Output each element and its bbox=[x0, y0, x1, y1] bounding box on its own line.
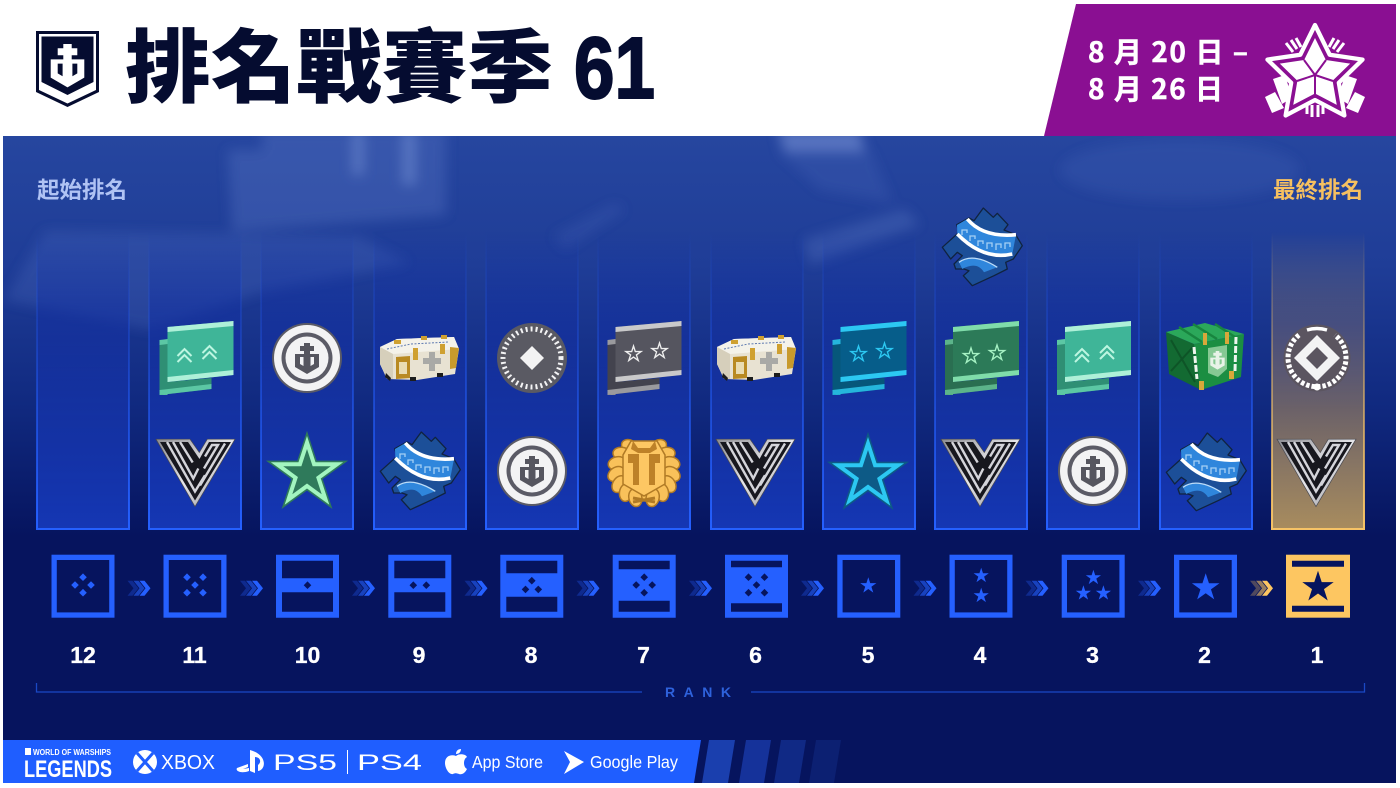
rank 12 icon bbox=[54, 557, 112, 615]
rank numbers: 2 bbox=[1198, 642, 1211, 668]
panel: rank 11 column bbox=[149, 232, 241, 529]
reward: silver V badge bbox=[1277, 439, 1356, 506]
gold arrow bbox=[1250, 581, 1273, 596]
rank 4 icon bbox=[952, 557, 1010, 615]
reward: blue patch bbox=[1166, 433, 1246, 511]
reward: grey star flag bbox=[608, 321, 682, 395]
title: 排名戰賽季 bbox=[125, 4, 553, 120]
logo: PS5 and PS4: PS5 bbox=[273, 750, 337, 775]
panel: rank 6 column bbox=[711, 232, 803, 529]
rank 7 icon bbox=[613, 555, 676, 618]
reward: white chest bbox=[380, 335, 459, 381]
reward: laurel diamond emblem bbox=[1284, 324, 1350, 392]
logo: World of Warships Legends: WORLD OF WARSHIPS bbox=[33, 748, 112, 757]
reward: anchor coin bbox=[272, 323, 342, 393]
rank numbers: 12 bbox=[70, 642, 96, 668]
rank numbers: 4 bbox=[974, 642, 987, 668]
reward: anchor coin bbox=[497, 436, 567, 506]
footer bar bbox=[3, 740, 841, 783]
rank 6 icon bbox=[725, 555, 788, 618]
logo: PS5 and PS4: PS4 bbox=[357, 750, 422, 775]
date text: 8 月 26 日 bbox=[1088, 68, 1223, 108]
logo: Google Play bbox=[564, 751, 678, 774]
rank 5 icon bbox=[840, 557, 898, 615]
panel: rank 9 column bbox=[374, 232, 466, 529]
icon: ranked star emblem bbox=[1265, 25, 1365, 117]
rank numbers: 7 bbox=[637, 642, 650, 668]
logo: World of Warships Legends: LEGENDS bbox=[24, 756, 112, 783]
logo: Xbox bbox=[133, 750, 215, 774]
rank 10 icon bbox=[276, 555, 339, 618]
rank 3 icon bbox=[1064, 557, 1122, 615]
reward: silver V badge bbox=[716, 439, 795, 506]
rank 2 icon bbox=[1177, 557, 1234, 615]
reward: diamond coin bbox=[497, 323, 567, 393]
label: final rank: 最終排名 bbox=[1273, 173, 1363, 205]
rank numbers: 6 bbox=[749, 642, 762, 668]
logo: App Store: App Store bbox=[472, 752, 543, 772]
reward: green star bbox=[269, 434, 345, 506]
reward: blue patch bbox=[380, 432, 460, 510]
reward: green chevron flag bbox=[1057, 321, 1131, 395]
rank numbers bbox=[70, 642, 1324, 668]
logo: Google Play: Google Play bbox=[590, 752, 678, 772]
panel: rank 4 column bbox=[935, 208, 1027, 529]
rank numbers: 9 bbox=[413, 642, 425, 668]
reward: cyan star bbox=[830, 435, 906, 507]
logo: World of Warships Legends bbox=[24, 748, 112, 783]
reward: green chevron flag bbox=[160, 321, 234, 395]
reward: silver V badge bbox=[941, 439, 1020, 506]
panel: rank 5 column bbox=[823, 232, 915, 529]
rank label: RANK bbox=[665, 684, 731, 700]
reward: white chest bbox=[717, 335, 796, 381]
progress arrows bbox=[128, 581, 1273, 596]
reward: blue patch bbox=[942, 208, 1022, 286]
panel: rank 3 column bbox=[1047, 232, 1139, 529]
panel: rank 7 column bbox=[598, 232, 690, 529]
icon: game shield logo bbox=[36, 31, 99, 107]
rank numbers: 3 bbox=[1086, 642, 1099, 668]
panel: rank 10 column bbox=[261, 232, 353, 529]
date text: 8 月 20 日 – bbox=[1088, 31, 1248, 71]
rank 1 icon bbox=[1286, 555, 1350, 618]
rank numbers: 11 bbox=[182, 642, 207, 668]
rank numbers: 1 bbox=[1311, 642, 1324, 668]
title: 61 bbox=[574, 20, 655, 117]
rank numbers: 10 bbox=[295, 642, 320, 668]
panel: rank 12 column bbox=[37, 232, 129, 529]
date text bbox=[1088, 31, 1248, 108]
rank bracket bbox=[36, 683, 1364, 700]
panel: rank 2 column bbox=[1160, 232, 1252, 529]
reward: green chest bbox=[1166, 323, 1244, 390]
footer stripes bbox=[702, 740, 841, 783]
rank 11 icon bbox=[166, 557, 224, 615]
logo: App Store bbox=[445, 749, 543, 774]
logo: PS5 and PS4 bbox=[237, 750, 422, 775]
reward: anchor coin bbox=[1058, 436, 1128, 506]
reward: green star flag bbox=[945, 321, 1019, 395]
rank icons row bbox=[54, 555, 1350, 618]
rank 8 icon bbox=[500, 555, 563, 618]
label: start rank: 起始排名 bbox=[37, 173, 127, 205]
panel: rank 8 column bbox=[486, 232, 578, 529]
reward: silver V badge bbox=[156, 439, 235, 506]
reward: blue star flag bbox=[832, 321, 906, 395]
panel: date banner bbox=[1044, 4, 1396, 136]
logo: Xbox: XBOX bbox=[161, 752, 215, 774]
rank 9 icon bbox=[388, 555, 451, 618]
reward: gold wreath emblem bbox=[605, 437, 683, 508]
rank numbers: 8 bbox=[525, 642, 538, 668]
rank numbers: 5 bbox=[862, 642, 875, 668]
panel: rank 1 column bbox=[1272, 232, 1364, 529]
